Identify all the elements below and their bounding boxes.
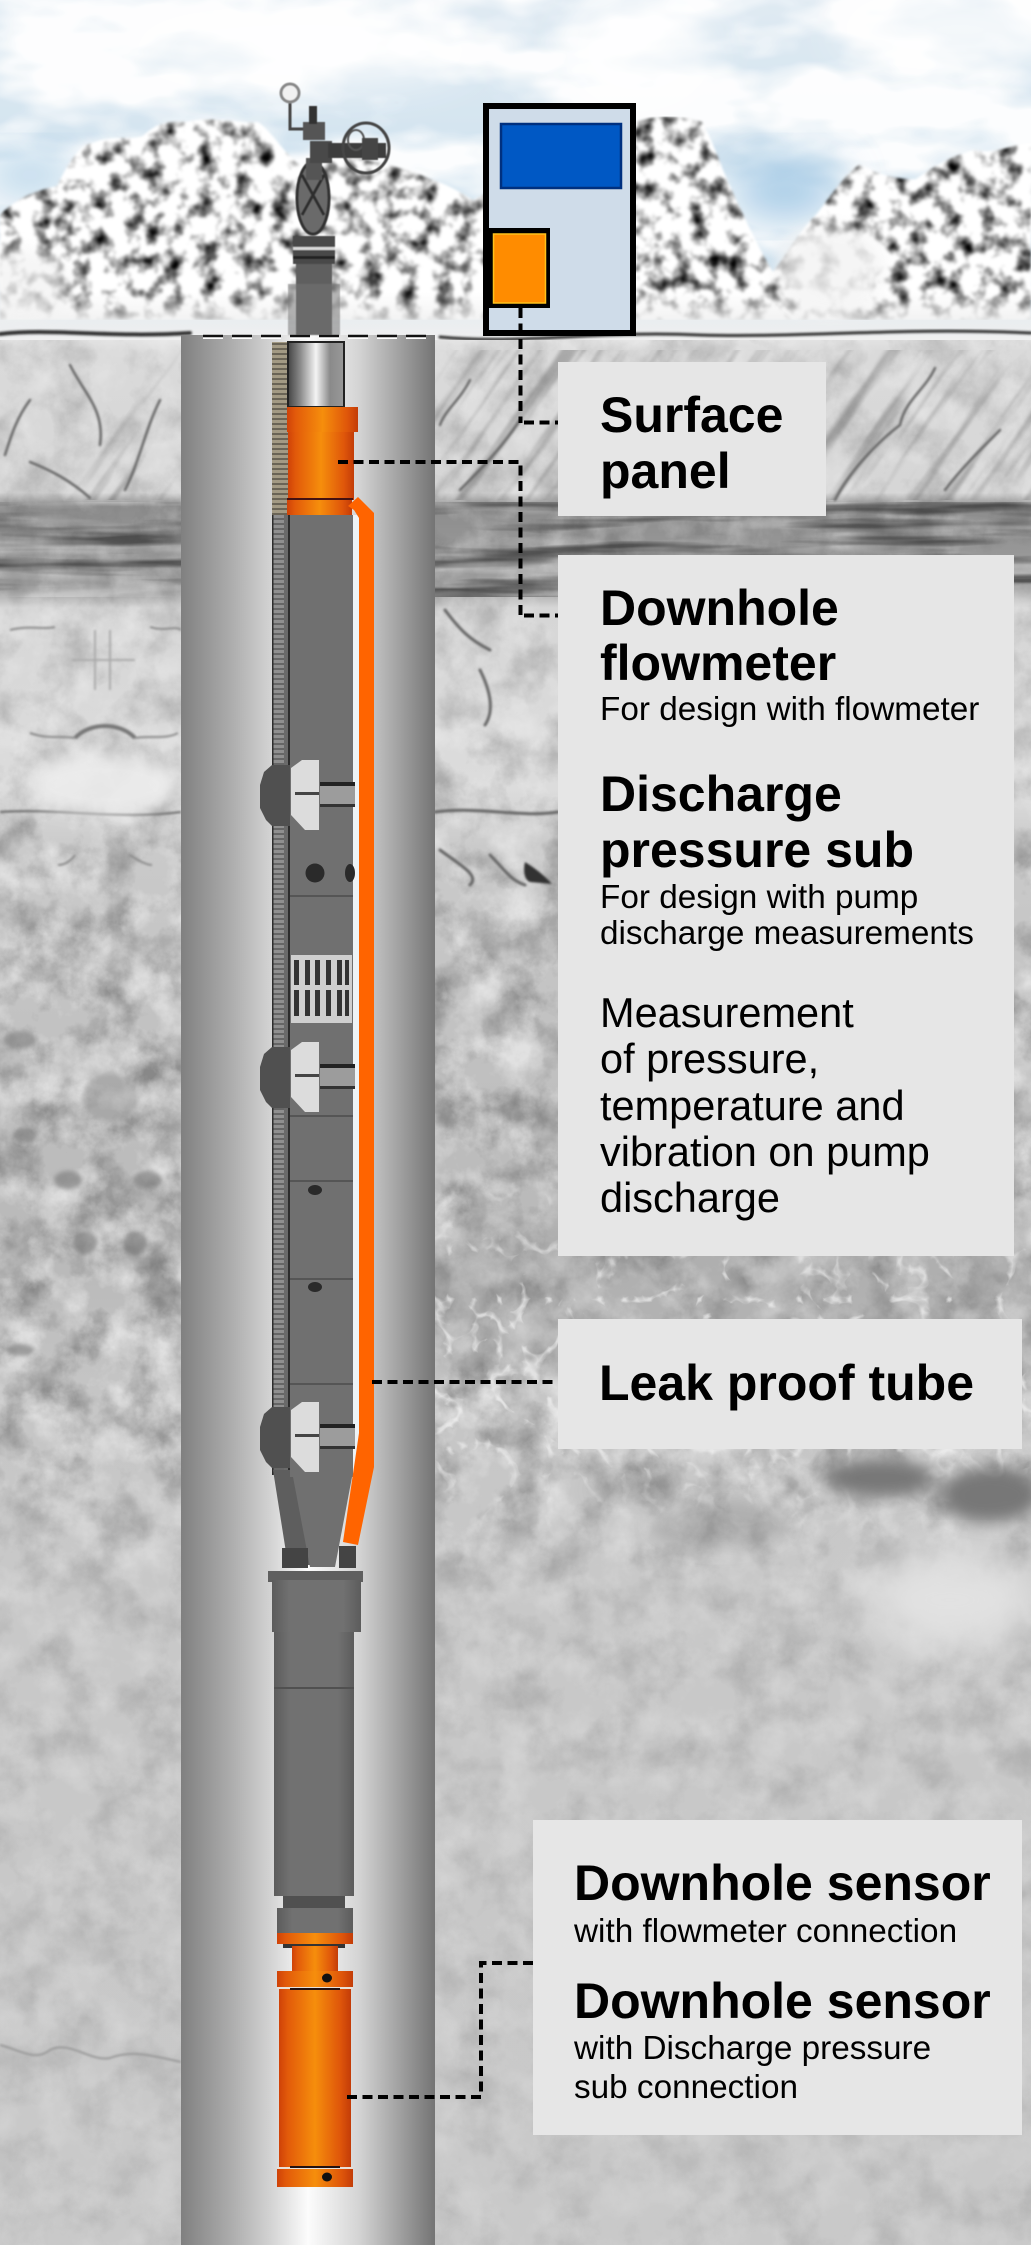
heading: downhole flowmeter: flowmeter (600, 635, 836, 691)
diagonal strata texture (86, 350, 1031, 500)
deep strata line (0, 2045, 181, 2062)
clamp 1 (260, 760, 355, 830)
right dark patch (590, 1458, 1031, 1551)
wellhead christmas tree (281, 84, 389, 335)
heading: discharge pressure sub: For design with pump (600, 879, 918, 916)
wellbore casing (181, 335, 435, 2245)
label: downhole sensors: Downhole sensor (574, 1855, 991, 1911)
label: downhole sensors: sub connection (574, 2069, 798, 2106)
pump body (353, 515, 359, 1475)
description: measurements: of pressure, (600, 1035, 819, 1082)
pump intake taper (293, 1477, 352, 1567)
label: leak proof tube (558, 1319, 1022, 1449)
clamp 2 (260, 1042, 355, 1112)
description: measurements: Measurement (600, 989, 854, 1036)
background: sky with clouds (0, 0, 1031, 340)
heading: discharge pressure sub: Discharge (600, 766, 842, 822)
label: leak proof tube: Leak proof tube (599, 1355, 974, 1411)
upper layer cracks (5, 365, 1000, 885)
description: measurements: temperature and (600, 1082, 905, 1129)
label: surface panel: Surface (600, 387, 783, 443)
left mirrored rock figure (0, 627, 181, 865)
valve wheel (343, 123, 389, 173)
intake grille (291, 955, 352, 1023)
panel display (501, 124, 621, 188)
label: downhole sensors (533, 1820, 1022, 2135)
clamp 3 (260, 1402, 355, 1472)
label: downhole sensors: Downhole sensor (574, 1973, 991, 2029)
label: downhole sensors: with flowmeter connection (573, 1913, 957, 1950)
flowmeter control module (486, 228, 550, 308)
background: snowy ground (0, 225, 1031, 354)
top cap (288, 342, 344, 407)
label: flowmeter and discharge pressure sub (558, 555, 1014, 1256)
label: surface panel (558, 362, 826, 516)
gauge (281, 84, 299, 102)
flowmeter body orange (287, 407, 358, 515)
heading: discharge pressure sub: pressure sub (600, 822, 914, 878)
downhole tool string (260, 342, 374, 2187)
discharge ports (306, 864, 355, 1292)
surface panel device (486, 106, 633, 333)
description: measurements: vibration on pump (600, 1128, 930, 1175)
description: measurements (600, 989, 930, 1221)
heading: downhole flowmeter: Downhole (600, 580, 839, 636)
label: downhole sensors: with Discharge pressure (573, 2030, 931, 2067)
pump spine (272, 515, 290, 1475)
heading: downhole flowmeter (600, 580, 979, 728)
leader lines (338, 308, 562, 2097)
heading: downhole flowmeter: For design with flowmeter (600, 691, 979, 728)
heading: discharge pressure sub (600, 766, 974, 952)
label: surface panel: panel (600, 443, 731, 499)
motor seal (268, 1571, 363, 1933)
leak proof orange tube (343, 497, 374, 1545)
dark rock pocket (524, 862, 552, 884)
heading: discharge pressure sub: discharge measurements (600, 915, 974, 952)
description: measurements: discharge (600, 1174, 780, 1221)
cable rope (272, 342, 288, 515)
dark band streaks (0, 502, 1031, 597)
white vein network (435, 1220, 1031, 1370)
downhole sensor (277, 1933, 353, 2187)
background: tree line (0, 117, 1031, 320)
